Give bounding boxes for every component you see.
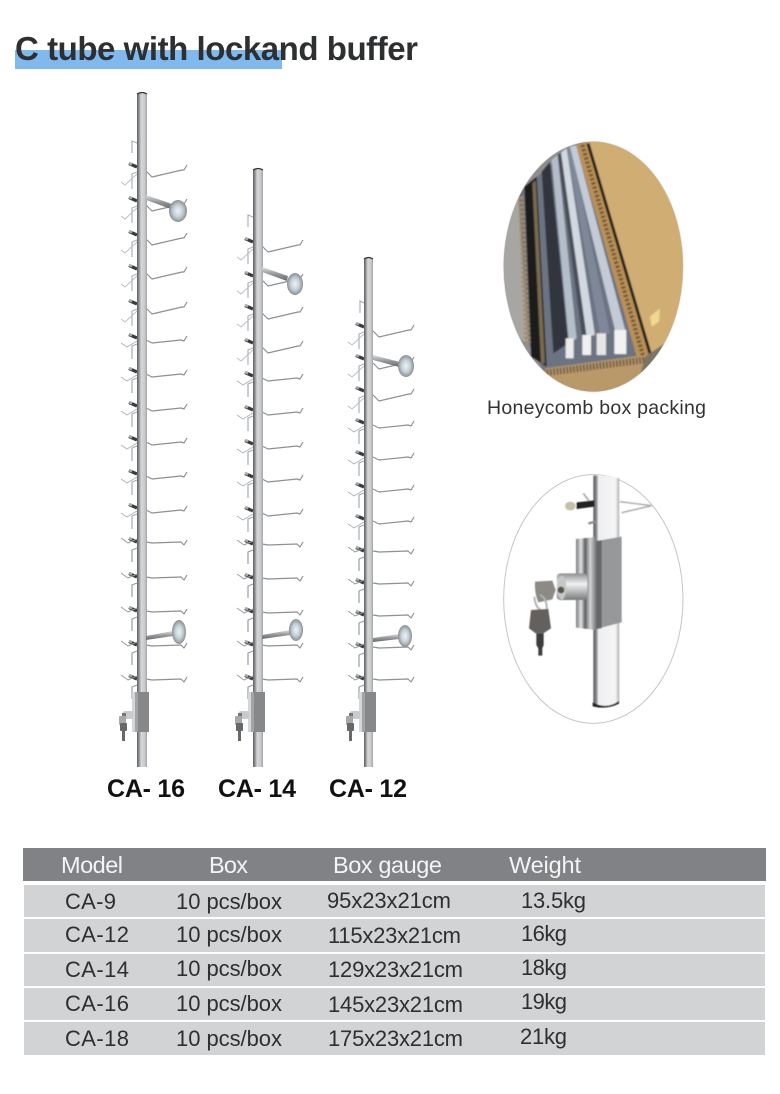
table row: CA-9 xyxy=(24,885,765,917)
title: C tube with lockand buffer xyxy=(15,30,418,67)
label: CA-14: CA- 14 xyxy=(218,775,296,803)
product: CA-16 rack xyxy=(119,92,187,767)
table row: CA-9: 95x23x21cm xyxy=(327,888,451,913)
table row: CA-12: 10 pcs/box xyxy=(176,922,282,947)
table row: CA-12: 115x23x21cm xyxy=(328,923,461,948)
table row: CA-18: 21kg xyxy=(520,1024,567,1049)
product: CA-14 rack xyxy=(235,168,303,767)
table row: CA-12: 16kg xyxy=(521,921,567,946)
table header row xyxy=(23,848,766,881)
caption: honeycomb box packing: Honeycomb box packing xyxy=(487,397,706,419)
table row: CA-16: 145x23x21cm xyxy=(328,992,463,1017)
table row: CA-14 xyxy=(24,954,765,986)
table row: CA-14: 10 pcs/box xyxy=(176,956,282,981)
table header row: Box xyxy=(209,852,248,878)
table row: CA-18: 175x23x21cm xyxy=(328,1026,463,1051)
table row: CA-14: 129x23x21cm xyxy=(328,957,463,982)
table header row: Model xyxy=(61,852,123,878)
table row: CA-16: 19kg xyxy=(521,989,567,1014)
table header row: Weight xyxy=(509,852,581,878)
product: CA-12 rack xyxy=(346,258,414,767)
table row: CA-14: CA-14 xyxy=(65,957,129,982)
table header row: Box gauge xyxy=(333,852,442,878)
table row: CA-9: CA-9 xyxy=(65,889,116,914)
table row: CA-14: 18kg xyxy=(521,955,567,980)
table row: CA-12 xyxy=(24,919,765,952)
table row: CA-18: CA-18 xyxy=(65,1026,129,1051)
spec table xyxy=(23,848,766,1055)
table row: CA-16: CA-16 xyxy=(65,991,129,1016)
table row: CA-12: CA-12 xyxy=(65,922,129,947)
table row: CA-9: 10 pcs/box xyxy=(176,889,282,914)
label: CA-16: CA- 16 xyxy=(107,775,185,803)
table row: CA-18 xyxy=(24,1022,765,1055)
photo: honeycomb box packing xyxy=(503,141,684,392)
photo: lock detail xyxy=(504,475,683,723)
label: CA-12: CA- 12 xyxy=(329,775,407,803)
table row: CA-16: 10 pcs/box xyxy=(176,991,282,1016)
table row: CA-16 xyxy=(24,988,765,1020)
table row: CA-9: 13.5kg xyxy=(521,888,586,913)
table row: CA-18: 10 pcs/box xyxy=(176,1026,282,1051)
